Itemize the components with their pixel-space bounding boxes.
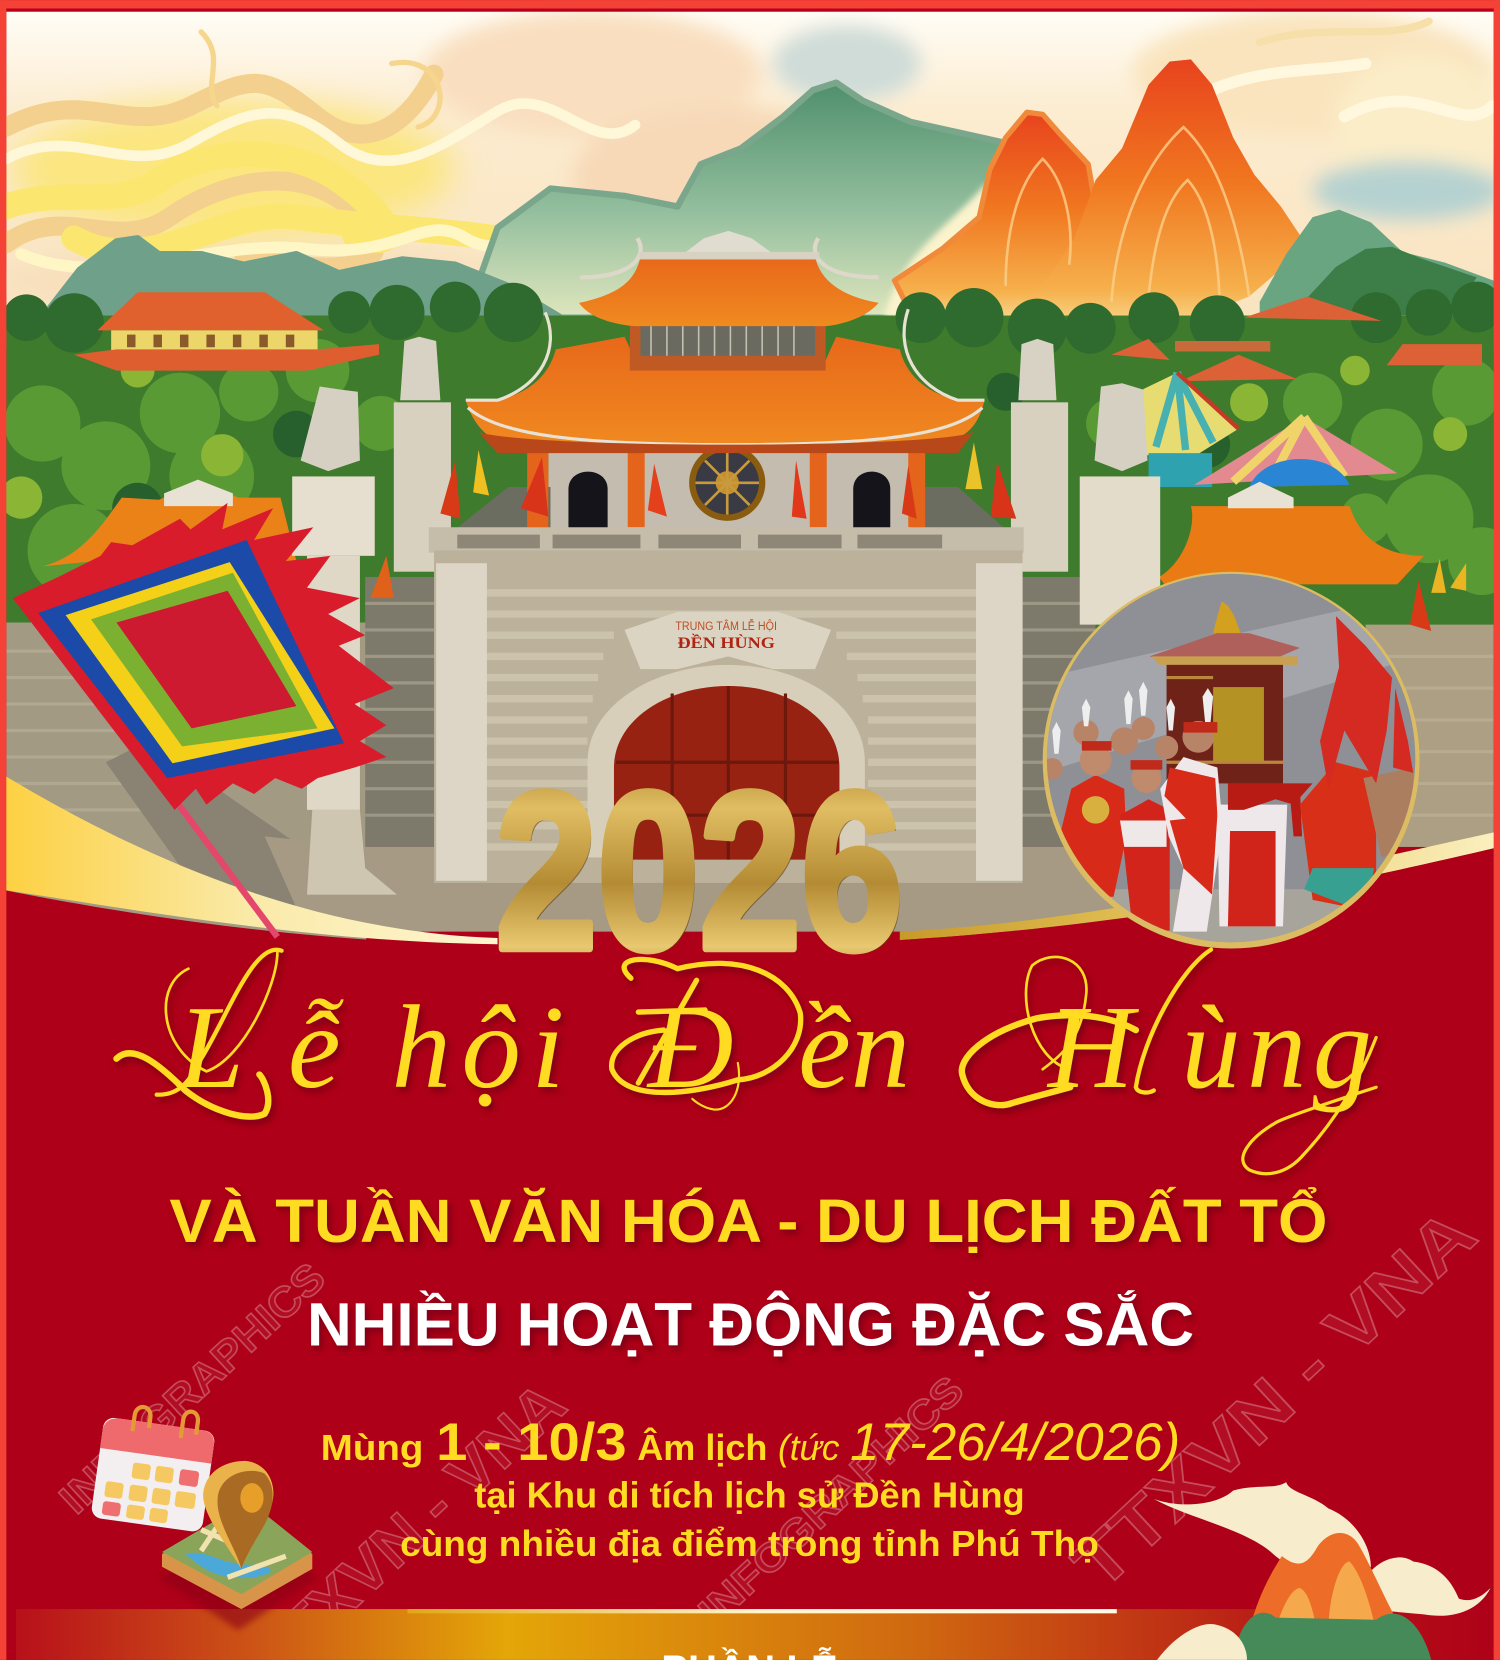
flags on terrace xyxy=(371,443,1466,631)
second man xyxy=(1120,799,1170,931)
year 2026: 2026 xyxy=(499,749,906,1000)
watermarks: INFOGRAPHICS xyxy=(50,1254,334,1523)
left man xyxy=(1060,775,1126,897)
stone brick texture xyxy=(487,593,976,847)
main title: ền xyxy=(798,981,910,1113)
right inner pillar xyxy=(1011,339,1068,572)
icon: calendar and map pin xyxy=(90,1400,318,1630)
date line: (tức xyxy=(778,1427,839,1468)
left distant palace xyxy=(74,292,379,371)
subtitle yellow: VÀ TUẦN VĂN HÓA - DU LỊCH ĐẤT TỔ xyxy=(169,1186,1327,1256)
main title: L xyxy=(176,981,244,1113)
watercolor clouds xyxy=(0,11,1500,317)
left outer pillar xyxy=(292,386,397,895)
blue frame xyxy=(38,540,344,778)
gold swoosh right xyxy=(900,831,1500,940)
gate sign: ĐỀN HÙNG xyxy=(677,633,775,652)
festival flag xyxy=(13,503,394,937)
palanquin carrying poles xyxy=(1228,783,1313,836)
flag pole xyxy=(175,799,277,937)
icon shadow xyxy=(159,1524,318,1630)
courtyard xyxy=(265,836,1376,932)
temple doors xyxy=(568,472,890,528)
photo medallion xyxy=(1042,572,1420,949)
red centre xyxy=(116,591,296,728)
red banner xyxy=(1320,616,1392,789)
sky xyxy=(6,11,1494,349)
date line: Âm lịch xyxy=(637,1427,767,1468)
date line xyxy=(321,1413,1180,1472)
main title xyxy=(116,950,1378,1174)
striped tent xyxy=(1138,373,1239,487)
orange peaks xyxy=(1249,1533,1403,1630)
gate tower xyxy=(434,551,1023,883)
balustrade xyxy=(429,527,1024,553)
palanquin xyxy=(1150,601,1300,783)
vent gallery xyxy=(630,318,826,371)
upper temple roof xyxy=(579,231,879,326)
pilasters xyxy=(436,563,1023,881)
gate sign xyxy=(625,612,831,669)
cream clouds lower left xyxy=(1157,1624,1247,1660)
centre man xyxy=(1160,757,1223,932)
cream clouds upper xyxy=(1154,1482,1371,1578)
main title: ùng xyxy=(1181,981,1378,1113)
golden swirl clouds xyxy=(6,21,1493,267)
main title: H xyxy=(1046,981,1139,1113)
large red mountain xyxy=(1011,59,1300,330)
location line two: cùng nhiều địa điểm trong tỉnh Phú Thọ xyxy=(400,1523,1099,1564)
title flourishes xyxy=(116,950,1376,1174)
yellow frame xyxy=(66,562,335,763)
far left hills xyxy=(42,238,561,318)
tree background xyxy=(6,316,1494,633)
orange columns xyxy=(527,445,925,527)
gate arch xyxy=(588,665,865,860)
pale bank clouds xyxy=(884,185,1101,328)
main title: Đ xyxy=(646,981,733,1113)
rainbow tent xyxy=(1194,417,1397,487)
inner wall right xyxy=(1016,577,1096,847)
gold swoosh left xyxy=(0,773,498,944)
date line: Mùng xyxy=(321,1427,423,1468)
gate sign: TRUNG TÂM LỄ HỘI xyxy=(675,620,777,633)
inner wall left xyxy=(365,577,439,847)
far left wall xyxy=(6,623,366,940)
distant blue hills xyxy=(466,83,1101,318)
right hills xyxy=(1260,210,1494,328)
far right wall xyxy=(1366,625,1494,847)
temple terrace xyxy=(455,487,1006,529)
wall brick lines xyxy=(6,603,1494,815)
lower left stone floor xyxy=(106,741,307,910)
dharma wheel xyxy=(689,445,765,521)
right outer pillar xyxy=(1080,383,1160,625)
green frame xyxy=(91,573,318,746)
date line: 17-26/4/2026) xyxy=(850,1413,1180,1472)
main title: ễ xyxy=(288,981,344,1113)
left side pavilion xyxy=(42,480,296,566)
watermarks: INFOGRAPHICS xyxy=(690,1367,972,1635)
right distant buildings xyxy=(1112,296,1482,381)
icon: calendar xyxy=(90,1400,218,1533)
location line one: tại Khu di tích lịch sử Đền Hùng xyxy=(474,1474,1025,1515)
decoration: mountains and clouds xyxy=(1154,1482,1490,1660)
left inner pillar xyxy=(394,337,451,572)
icon: map pin xyxy=(203,1461,273,1569)
upper temple wall xyxy=(548,439,910,529)
tree canopy xyxy=(0,282,1500,597)
red lower panel xyxy=(0,847,1500,1660)
green foot hills xyxy=(1233,1613,1431,1660)
brown sleeve xyxy=(1363,768,1413,858)
flame border xyxy=(13,503,394,810)
subtitle white: NHIỀU HOẠT ĐỘNG ĐẶC SẮC xyxy=(307,1291,1194,1360)
right man xyxy=(1300,762,1376,913)
cream clouds right xyxy=(1360,1557,1490,1616)
date line: 1 - 10/3 xyxy=(436,1413,627,1472)
year 2026: 2026 xyxy=(495,746,903,997)
main title: hội xyxy=(392,981,575,1113)
right side pavilion xyxy=(1159,482,1424,584)
rear man xyxy=(1217,805,1287,926)
watermarks xyxy=(50,1193,1491,1660)
small red mountain xyxy=(894,112,1095,323)
section bar xyxy=(16,1609,1500,1660)
icon: map tile xyxy=(162,1501,312,1609)
back row heads xyxy=(1042,717,1178,779)
hero illustration xyxy=(0,11,1500,940)
lower temple roof xyxy=(466,309,984,453)
watermarks: TTXVN - VNA xyxy=(1058,1193,1491,1604)
procession crowd xyxy=(1042,682,1413,932)
golden glow xyxy=(11,101,455,238)
